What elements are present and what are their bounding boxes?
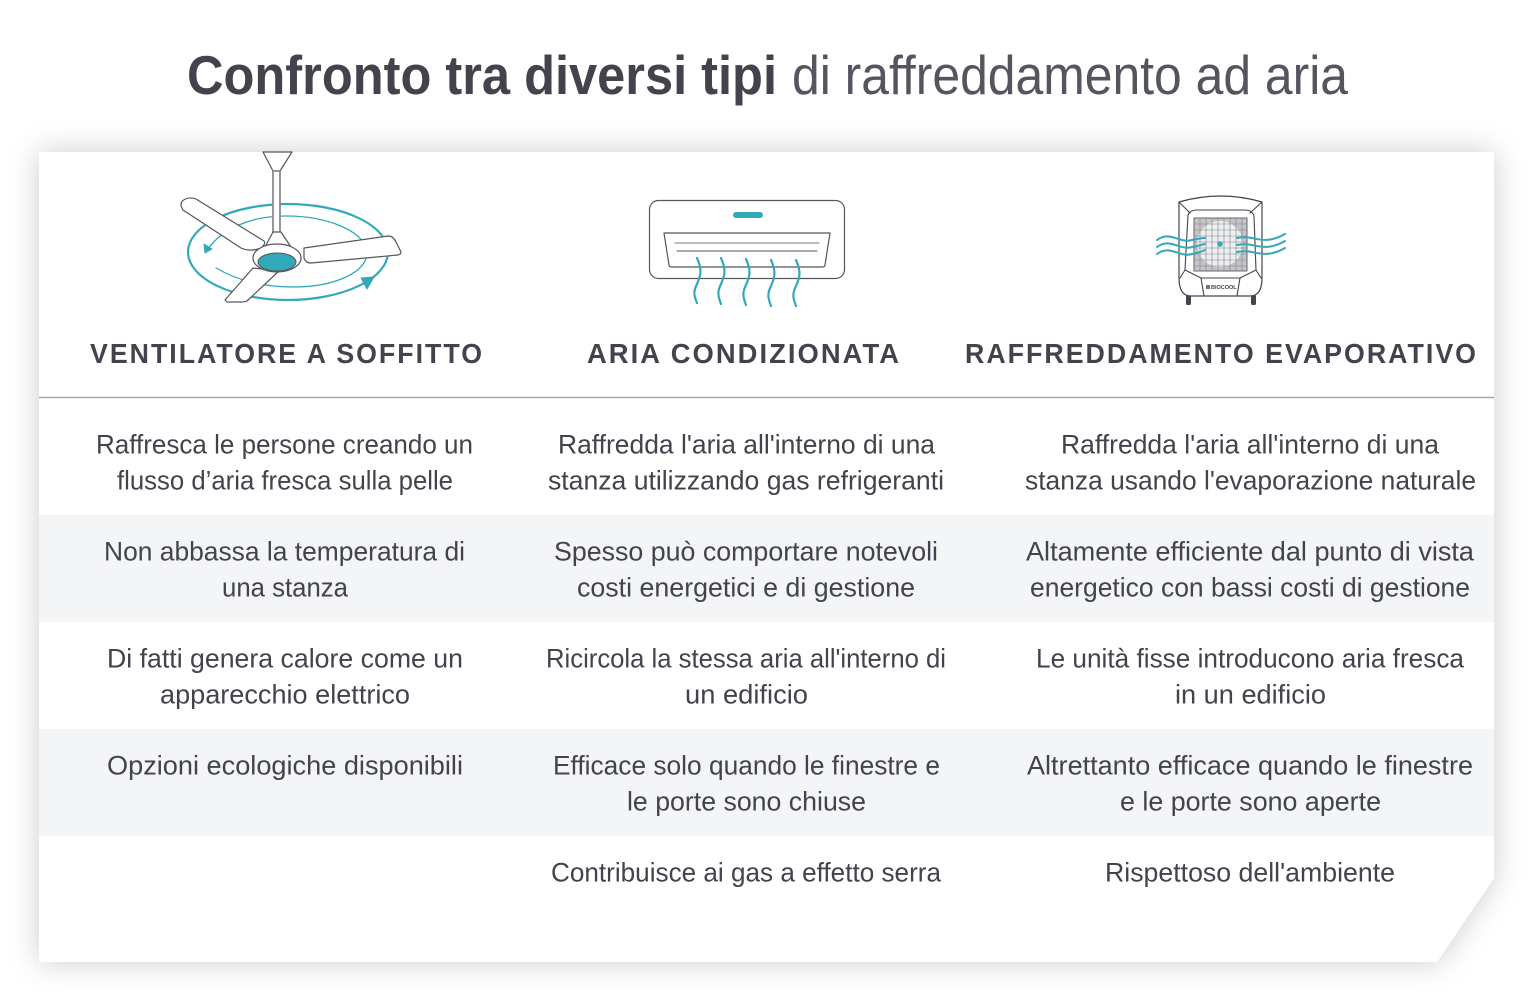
heading: aria condizionata: ARIA CONDIZIONATA (587, 338, 901, 369)
column: aria condizionata (546, 429, 946, 887)
column: aria condizionata: stanza utilizzando gas refrigeranti (548, 465, 944, 495)
column: raffreddamento evaporativo: Rispettoso dell'ambiente (1105, 857, 1395, 887)
panel: comparison table (39, 152, 1494, 962)
column: aria condizionata: Contribuisce ai gas a effetto serra (551, 857, 941, 887)
column: raffreddamento evaporativo: Raffredda l'aria all'interno di una (1061, 429, 1439, 459)
column: raffreddamento evaporativo: stanza usando l'evaporazione naturale (1025, 465, 1476, 495)
column: aria condizionata: un edificio (685, 679, 808, 709)
column: raffreddamento evaporativo (1025, 429, 1476, 887)
column: aria condizionata: Efficace solo quando le finestre e (553, 750, 940, 780)
column: aria condizionata: Spesso può comportare notevoli (554, 536, 938, 566)
column: ventilatore a soffitto: una stanza (222, 572, 348, 602)
column: ventilatore a soffitto: Di fatti genera calore come un (107, 643, 463, 673)
column: aria condizionata: le porte sono chiuse (627, 786, 866, 816)
heading: raffreddamento evaporativo: RAFFREDDAMENTO EVAPORATIVO (965, 338, 1478, 369)
column: raffreddamento evaporativo: in un edificio (1175, 679, 1326, 709)
title (187, 44, 1348, 106)
column: raffreddamento evaporativo: Le unità fisse introducono aria fresca (1036, 643, 1464, 673)
column: raffreddamento evaporativo: Altrettanto efficace quando le finestre (1027, 750, 1473, 780)
column: aria condizionata: costi energetici e di gestione (577, 572, 915, 602)
column: ventilatore a soffitto: Non abbassa la temperatura di (104, 536, 465, 566)
icon: evaporative cooler: BIOCOOL (1211, 285, 1237, 291)
column: raffreddamento evaporativo: Altamente efficiente dal punto di vista (1026, 536, 1474, 566)
icon: ceiling fan (181, 152, 401, 302)
column: ventilatore a soffitto: flusso d’aria fresca sulla pelle (117, 465, 453, 495)
column: raffreddamento evaporativo: e le porte sono aperte (1120, 786, 1381, 816)
column: ventilatore a soffitto: apparecchio elettrico (160, 679, 410, 709)
title: di raffreddamento ad aria (792, 44, 1348, 106)
icon: evaporative cooler (1157, 196, 1285, 305)
title: Confronto tra diversi tipi (187, 44, 777, 106)
column: aria condizionata: Ricircola la stessa aria all'interno di (546, 643, 946, 673)
column: ventilatore a soffitto: Raffresca le persone creando un (96, 429, 473, 459)
heading: ventilatore a soffitto: VENTILATORE A SOFFITTO (90, 338, 484, 369)
icon: air conditioner (650, 200, 844, 306)
column: raffreddamento evaporativo: energetico con bassi costi di gestione (1030, 572, 1470, 602)
column: ventilatore a soffitto (96, 429, 473, 780)
column: aria condizionata: Raffredda l'aria all'interno di una (558, 429, 935, 459)
column: ventilatore a soffitto: Opzioni ecologiche disponibili (107, 750, 463, 780)
